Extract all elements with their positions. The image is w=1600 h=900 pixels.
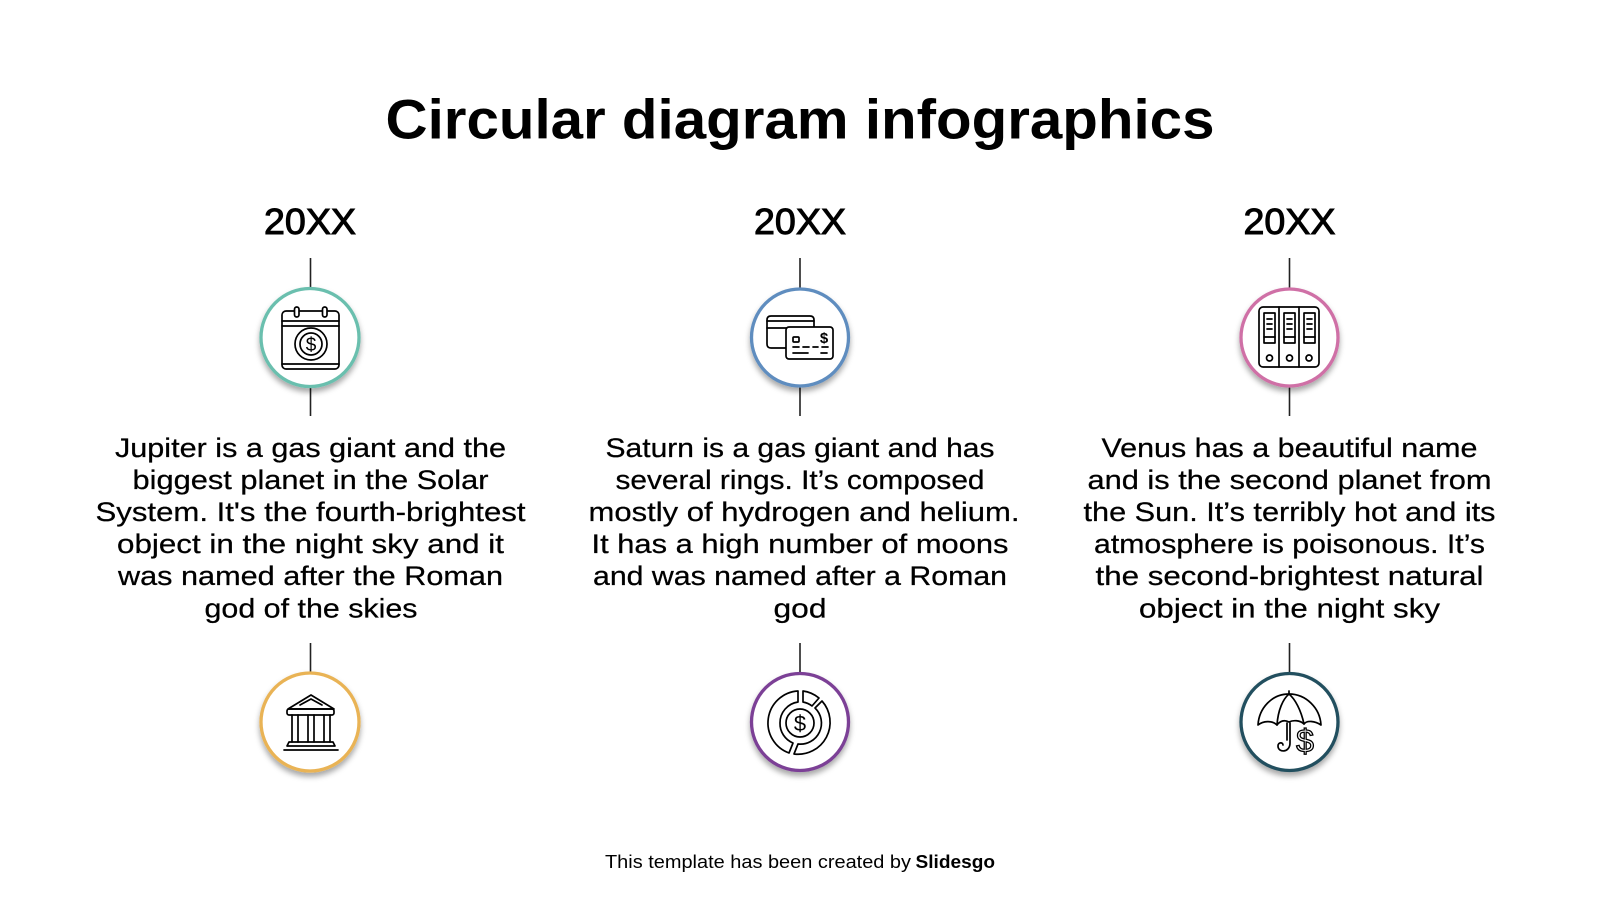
description: It has a high number of moons [592,529,1008,559]
title: Circular diagram infographics [386,88,1214,150]
column: Jupiter [96,201,526,771]
icon: credit cards [752,289,848,386]
description: Venus has a beautiful name [1102,433,1478,463]
connector lines [799,258,801,416]
description: god [774,594,826,624]
description: several rings. It’s composed [616,465,984,495]
year heading: 20XX [754,201,846,242]
description: god of the skies [204,594,418,624]
icon: dollar donut chart: $ [794,711,806,736]
icon: credit cards: $ [820,330,829,347]
description: the Sun. It’s terribly hot and its [1084,497,1496,527]
description [1084,433,1496,624]
description: and was named after a Roman [593,561,1007,591]
column: Venus [1084,201,1496,770]
description: Saturn is a gas giant and has [606,433,994,463]
icon: bank building [261,673,359,771]
description: object in the night sky and it [117,529,505,559]
icon: calendar with dollar coin [261,288,359,386]
description: mostly of hydrogen and helium. [588,497,1020,527]
lower connector line [799,643,801,672]
description: System. It's the fourth-brightest [96,497,526,527]
connector lines [310,258,312,416]
description: Jupiter is a gas giant and the [115,433,506,463]
description: biggest planet in the Solar [132,465,489,495]
description: was named after the Roman [117,561,503,591]
icon: umbrella with dollar: $ [1296,723,1314,759]
description: the second-brightest natural [1096,561,1484,591]
description: atmosphere is poisonous. It’s [1094,529,1485,559]
icon: binders [1241,289,1338,386]
column: Saturn [588,201,1020,770]
description: object in the night sky [1139,594,1441,624]
icon: umbrella with dollar [1241,674,1338,770]
footer credit: This template has been created by [605,852,911,872]
description: and is the second planet from [1088,465,1492,495]
description [96,433,526,624]
connector lines [1288,258,1290,416]
year heading: 20XX [264,201,356,242]
description [588,433,1020,624]
icon: calendar with dollar coin: $ [306,335,317,356]
lower connector line [310,643,312,672]
footer credit: Slidesgo [916,852,995,872]
year heading: 20XX [1244,201,1336,242]
lower connector line [1288,643,1290,672]
icon: dollar donut chart [752,674,848,770]
